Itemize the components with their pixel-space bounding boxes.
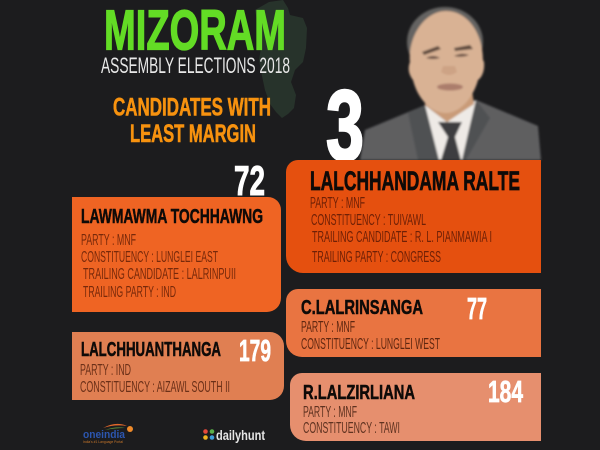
neck [425, 90, 474, 122]
candidate details: TRAILING CANDIDATE : LALRINPUII [83, 266, 236, 283]
margin number 77: 77 [467, 291, 487, 326]
rank number 3: 3 [326, 70, 364, 182]
candidate details: CONSTITUENCY : AIZAWL SOUTH II [80, 379, 230, 396]
candidate details: CONSTITUENCY : LUNGLEI WEST [301, 336, 440, 353]
logo: oneindia [83, 424, 133, 444]
icon: Mizoram map silhouette [255, 0, 307, 118]
suit [360, 100, 541, 160]
panel background [72, 332, 284, 400]
tie [438, 122, 462, 160]
candidate details [80, 362, 230, 396]
candidate details: PARTY : MNF [301, 319, 355, 336]
logo: oneindia: oneindia [83, 429, 126, 441]
candidate details: PARTY : MNF [81, 232, 136, 249]
face [409, 11, 484, 113]
candidate name: C.LALRINSANGA [301, 297, 423, 319]
eyes [426, 54, 469, 59]
hair [407, 7, 483, 77]
mouth [437, 84, 463, 90]
candidate details: TRAILING PARTY : CONGRESS [312, 249, 441, 266]
candidate details: CONSTITUENCY : TUIVAWL [311, 212, 426, 229]
title: MIZORAM [104, 0, 286, 62]
margin number 184: 184 [488, 374, 524, 409]
panel: Lalchhandama Ralte [286, 160, 541, 273]
panel background [72, 197, 281, 312]
shirt collar [425, 100, 476, 160]
candidate name: R.LALZIRLIANA [303, 382, 415, 404]
candidate details: TRAILING PARTY : IND [83, 284, 176, 301]
nose shade [441, 66, 457, 75]
candidate details: PARTY : IND [80, 362, 131, 379]
panel background [286, 160, 541, 273]
heading: candidates with least margin [113, 94, 271, 148]
lapels [408, 100, 490, 160]
candidate details: PARTY : MNF [303, 404, 357, 421]
panel: R. Lalzirliana [290, 373, 541, 441]
brows [422, 45, 473, 55]
candidate name: LAWMAWMA TOCHHAWNG [81, 206, 263, 228]
candidate details [301, 319, 440, 353]
candidate details [303, 404, 400, 437]
photo: candidate portrait [360, 7, 541, 160]
panel: C. Lalrinsanga [286, 289, 541, 357]
logo: dailyhunt [203, 427, 265, 443]
candidate details [310, 195, 492, 266]
margin number 179: 179 [239, 333, 271, 368]
candidate name: LALCHHUANTHANGA [81, 339, 221, 361]
subtitle: ASSEMBLY ELECTIONS 2018 [101, 53, 290, 78]
heading: candidates with least margin: CANDIDATES WITH [113, 94, 271, 122]
candidate details: CONSTITUENCY : TAWI [303, 420, 400, 437]
margin number 72: 72 [234, 157, 265, 204]
panel background [286, 289, 541, 357]
candidate details: CONSTITUENCY : LUNGLEI EAST [81, 249, 218, 266]
panel: Lawmawma Tochhawng [72, 197, 281, 312]
logo: oneindia: India's #1 Language Portal [83, 440, 123, 444]
panel background [290, 373, 541, 441]
logo: dailyhunt: dailyhunt [216, 427, 265, 443]
panel: Lalchhuanthanga [72, 332, 284, 400]
heading: candidates with least margin: LEAST MARGIN [130, 120, 256, 148]
candidate details: PARTY : MNF [310, 195, 365, 212]
candidate details [81, 232, 236, 301]
